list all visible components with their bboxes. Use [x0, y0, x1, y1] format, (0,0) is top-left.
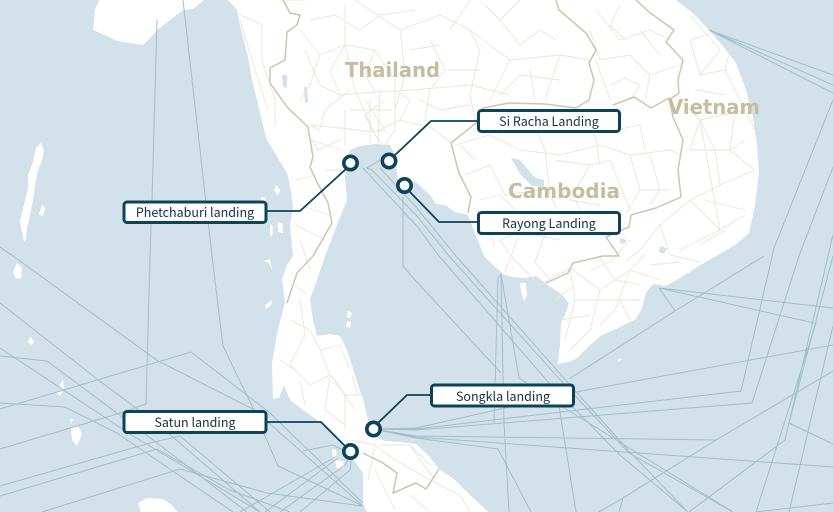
lakes	[282, 75, 667, 254]
label: Si Racha Landing	[478, 110, 620, 132]
marker: Satun	[344, 445, 357, 458]
label: Songkla landing	[432, 385, 574, 406]
marker: Phetchaburi	[344, 156, 357, 170]
leader: Satun	[266, 422, 345, 446]
country label: Vietnam: Vietnam	[668, 95, 760, 119]
leader: Rayong	[409, 191, 478, 222]
marker: Si Racha	[382, 154, 396, 168]
marker: Songkla	[367, 422, 380, 436]
label: Rayong Landing: Rayong Landing	[502, 213, 596, 232]
label: Satun landing: Satun landing	[154, 412, 236, 431]
leader: Phetchaburi	[266, 169, 346, 211]
label: Si Racha Landing: Si Racha Landing	[499, 111, 599, 130]
country label: Thailand: Thailand	[345, 58, 440, 82]
country label: Cambodia: Cambodia	[508, 179, 620, 203]
country borders	[270, 0, 683, 493]
leader: Songkla	[378, 395, 431, 423]
marker: Rayong	[398, 179, 411, 192]
road network	[230, 0, 755, 512]
label: Songkla landing: Songkla landing	[456, 386, 550, 405]
label: Phetchaburi landing: Phetchaburi landing	[136, 202, 254, 221]
label: Satun landing	[124, 412, 266, 432]
label: Rayong Landing	[478, 212, 620, 234]
leader: Si Racha	[394, 121, 478, 156]
